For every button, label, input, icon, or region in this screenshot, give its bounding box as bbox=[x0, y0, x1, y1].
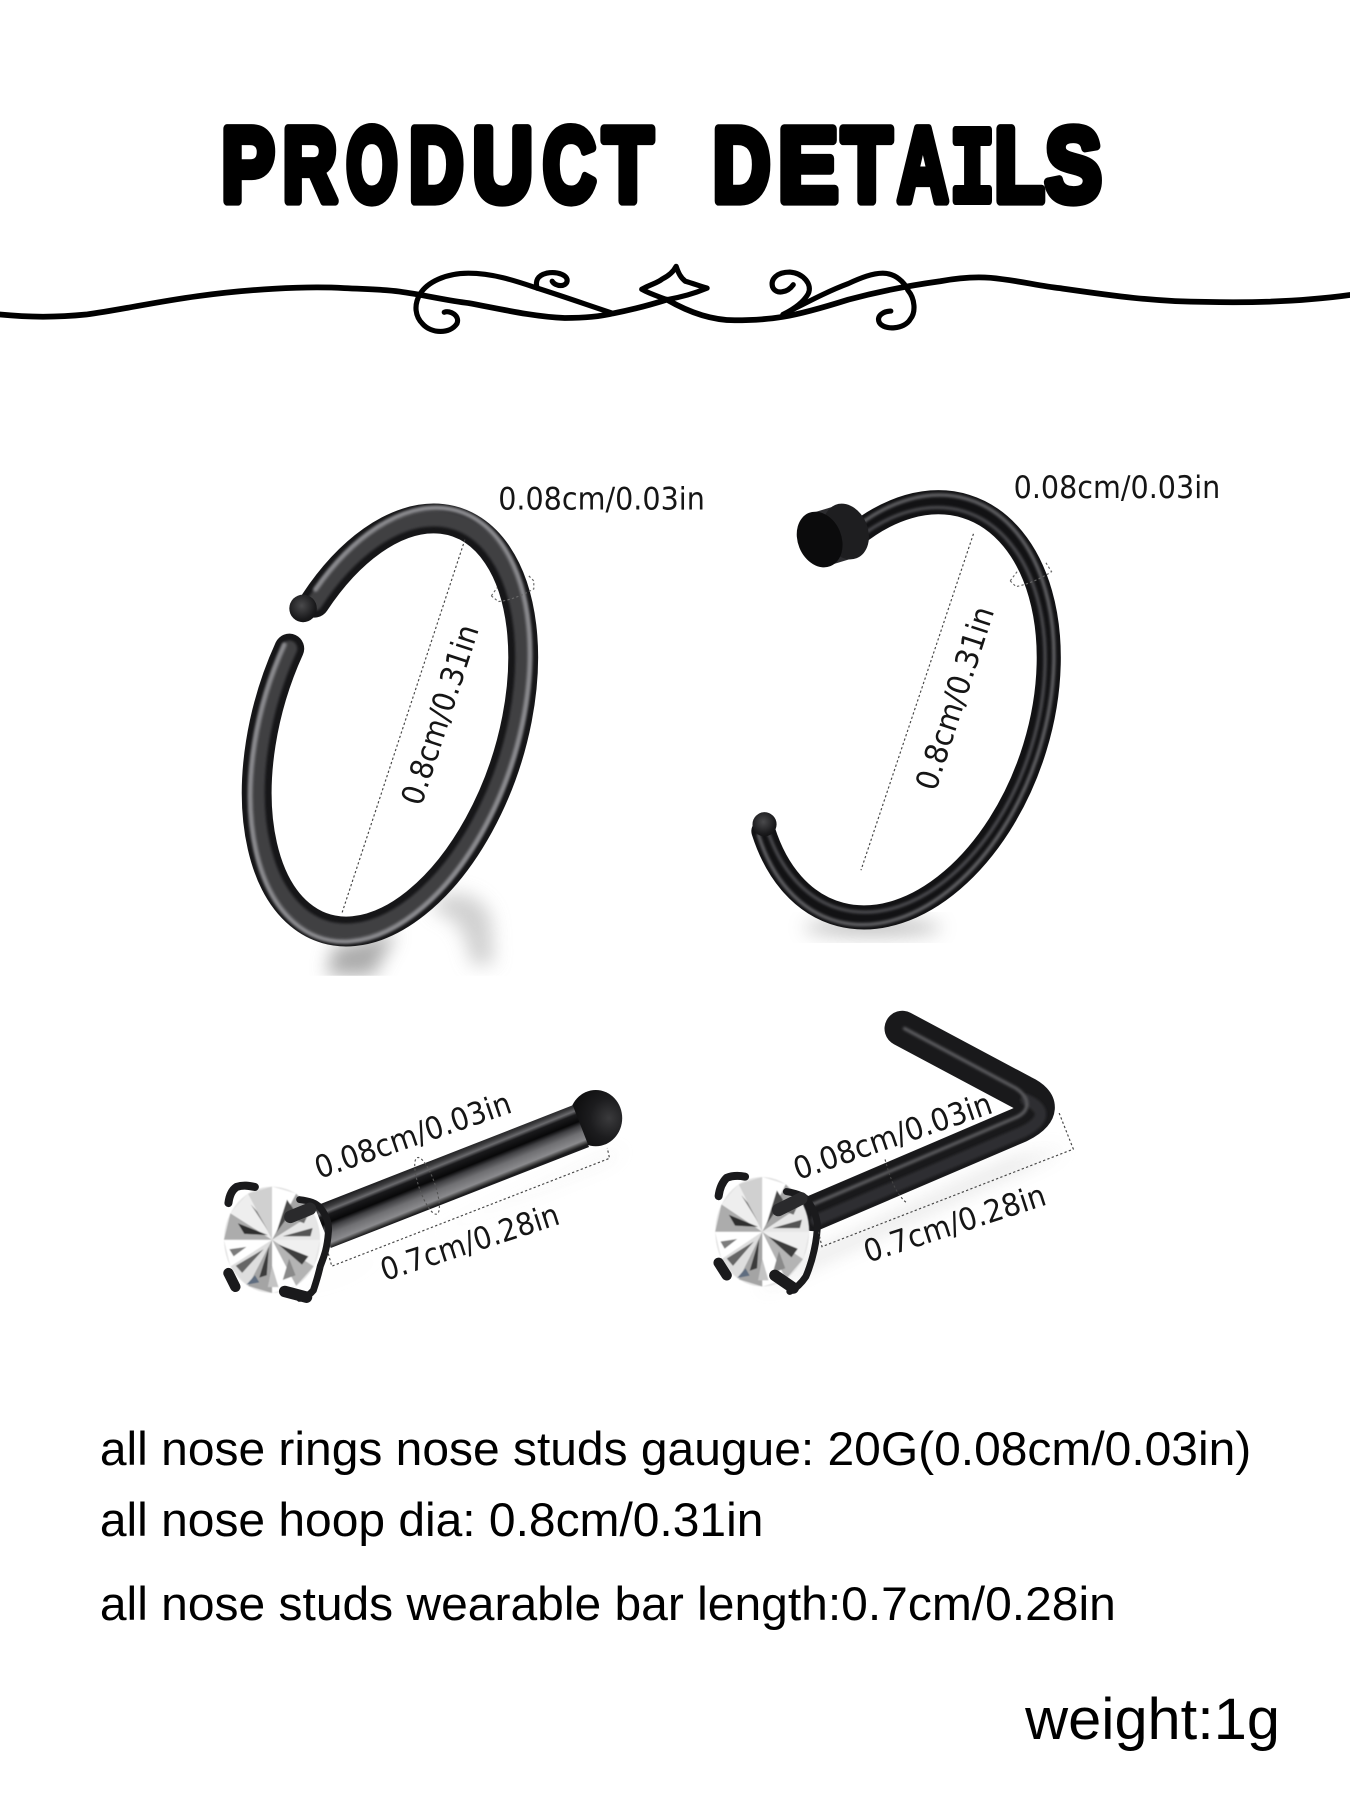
spec text: gauge: all nose rings nose studs gaugue: 20G(0.08cm/0.03in) bbox=[100, 1422, 1251, 1475]
hoop 2 diameter dashed line bbox=[861, 534, 973, 870]
hoop 2 diameter label: 0.8cm/0.31in bbox=[909, 602, 1002, 795]
bone stud shadow bbox=[276, 1148, 626, 1303]
title: S bbox=[1045, 107, 1102, 224]
spec text: bar length: all nose studs wearable bar length:0.7cm/0.28in bbox=[100, 1577, 1116, 1630]
title: A bbox=[898, 107, 948, 223]
icon: straight bone nose stud bbox=[224, 1090, 622, 1298]
title: L bbox=[995, 106, 1044, 223]
title: O bbox=[346, 106, 398, 224]
icon: open hoop nose ring bbox=[250, 508, 530, 941]
half hoop ball tip bbox=[752, 812, 777, 836]
hoop 1 diameter label: 0.8cm/0.31in bbox=[395, 620, 487, 809]
title: P bbox=[221, 106, 274, 223]
stud gem bbox=[224, 1187, 320, 1293]
L stud prong setting bbox=[786, 1192, 817, 1291]
title: C bbox=[543, 107, 596, 224]
ornamental divider bbox=[0, 266, 1350, 331]
stud 1 gauge dashed ellipse bbox=[410, 1155, 444, 1217]
stud prong setting bbox=[300, 1200, 329, 1298]
ring ball tip bbox=[289, 595, 317, 622]
stud 1 gauge label: 0.08cm/0.03in bbox=[310, 1086, 516, 1187]
title bbox=[221, 106, 1102, 233]
stud 1 length dashed bracket bbox=[328, 1148, 610, 1266]
title: T bbox=[842, 106, 892, 223]
title: U bbox=[473, 107, 533, 224]
spec text: hoop diameter: all nose hoop dia: 0.8cm/0.31in bbox=[100, 1493, 763, 1546]
hoop 1 gauge dashed marker bbox=[491, 575, 534, 602]
hoop ring shadow bbox=[327, 893, 494, 976]
icon: half hoop nose ring with flat top bbox=[752, 495, 1054, 925]
hoop 2 gauge dashed marker bbox=[1010, 562, 1052, 587]
spec text: weight: weight:1g bbox=[1024, 1687, 1280, 1752]
hoop 1 gauge label: 0.08cm/0.03in bbox=[498, 482, 705, 518]
title: E bbox=[778, 107, 838, 223]
title: D bbox=[409, 108, 463, 224]
stud 2 gauge label: 0.08cm/0.03in bbox=[789, 1086, 997, 1188]
half hoop shadow bbox=[804, 921, 941, 934]
stud ball end bbox=[569, 1090, 622, 1146]
stud 1 length label: 0.7cm/0.28in bbox=[376, 1197, 564, 1289]
title: D bbox=[713, 106, 770, 223]
L-shaped stud shadow bbox=[758, 1148, 1068, 1291]
L stud gem bbox=[715, 1177, 809, 1287]
stud 2 length label: 0.7cm/0.28in bbox=[859, 1178, 1050, 1270]
hoop 1 diameter dashed line bbox=[342, 540, 465, 913]
title: T bbox=[603, 106, 653, 223]
flat disc face bbox=[789, 505, 851, 574]
icon: L-shaped nose stud bbox=[715, 1029, 1041, 1291]
stud 2 length dashed bracket bbox=[818, 1111, 1073, 1247]
title: R bbox=[283, 108, 337, 224]
flat disc head side bbox=[820, 532, 846, 540]
title: I bbox=[950, 111, 995, 233]
stud 2 gauge dashed marker bbox=[885, 1159, 907, 1203]
hoop 2 gauge label: 0.08cm/0.03in bbox=[1014, 470, 1220, 506]
